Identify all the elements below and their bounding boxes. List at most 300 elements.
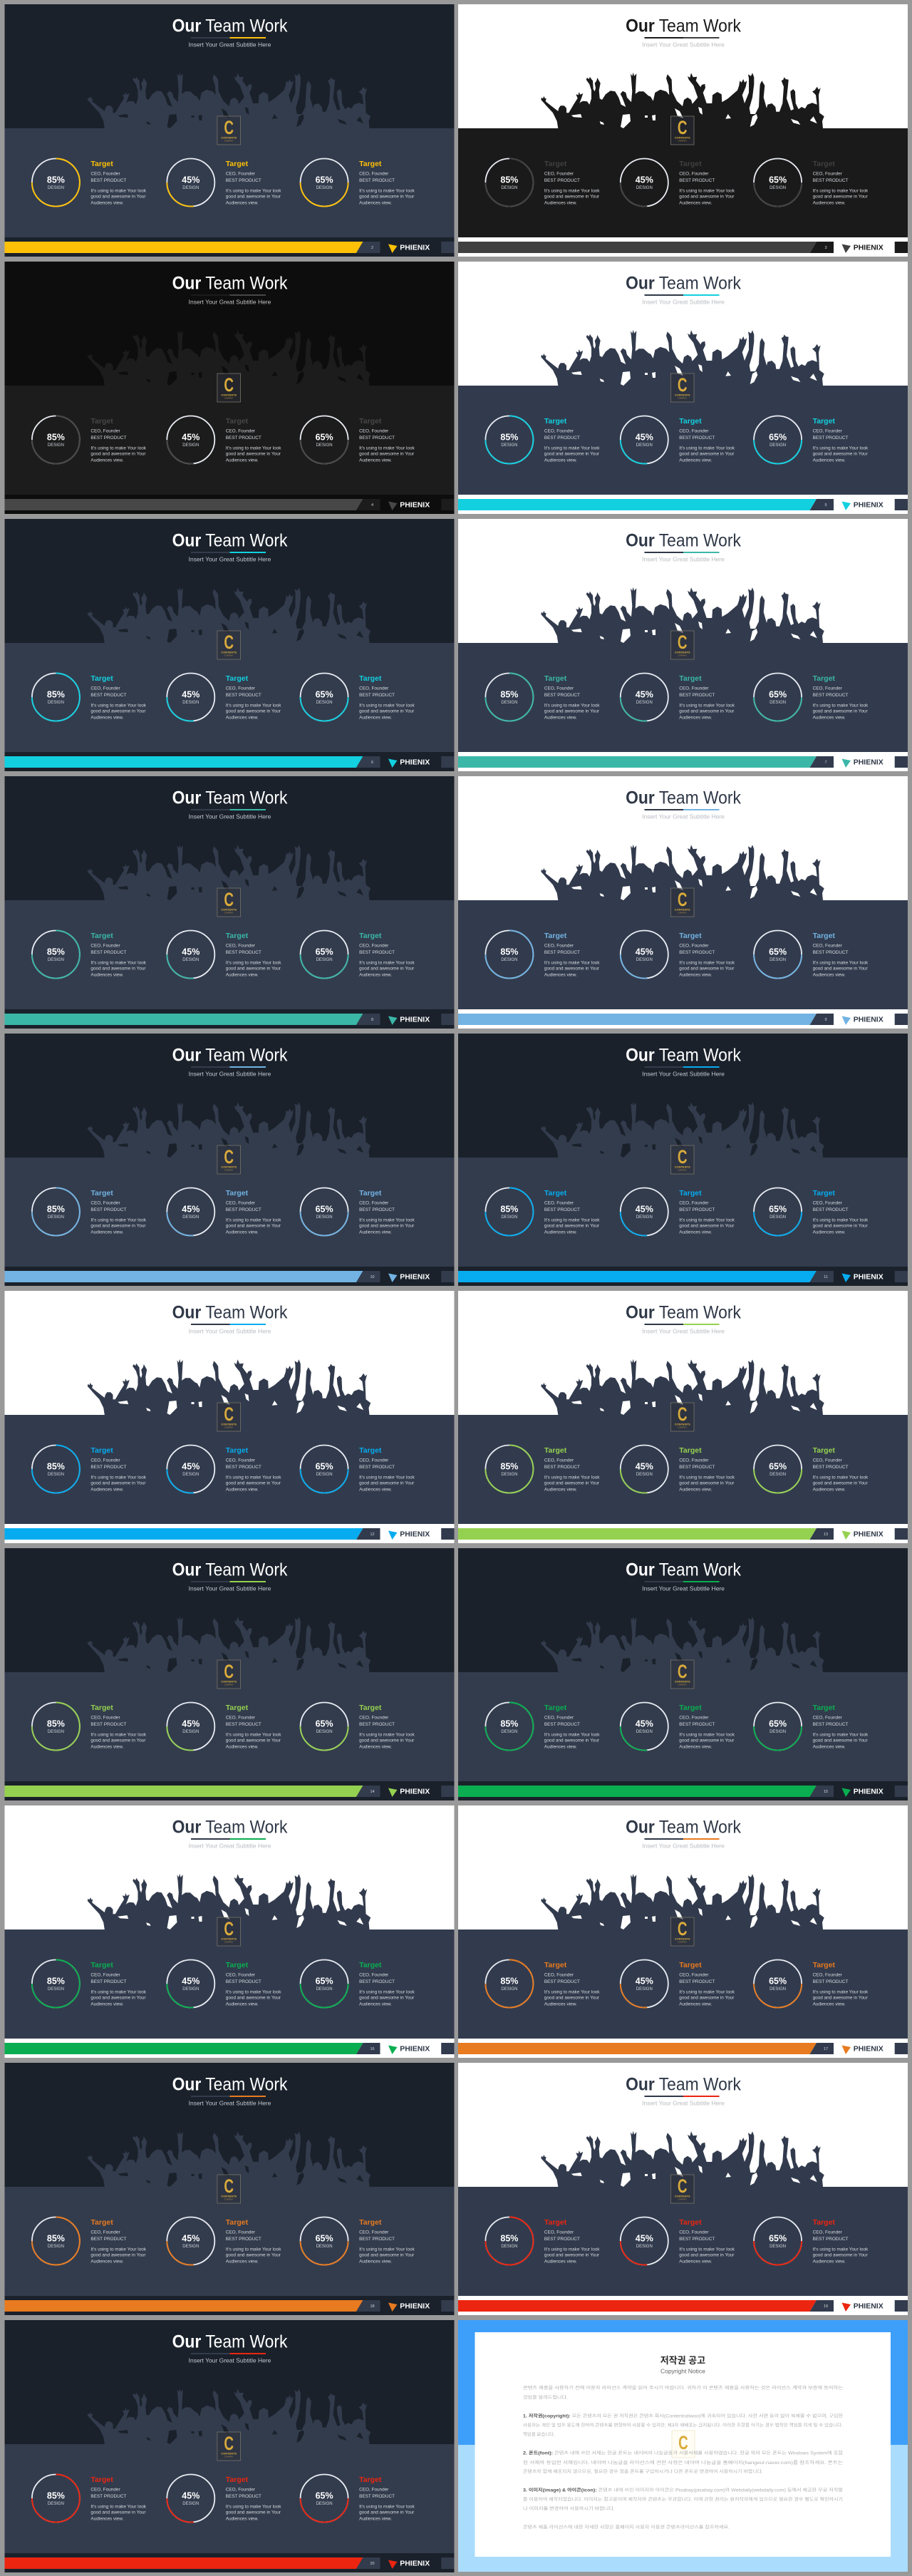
metric 65%: 65% <box>316 1977 333 1987</box>
metric 85%: Audiences view. <box>544 201 577 206</box>
metric 65%: Target <box>359 417 382 426</box>
title underline <box>644 1581 720 1582</box>
metric 65%: DESIGN <box>770 2245 786 2249</box>
metric 45%: BEST PRODUCT <box>679 1465 715 1470</box>
slide background <box>4 262 455 514</box>
metric 45%: Audiences view. <box>226 1230 259 1235</box>
logo badge: CONTENTS <box>221 393 237 396</box>
metric 65%: 65% <box>769 1719 787 1729</box>
metric 85%: DESIGN <box>48 1473 64 1477</box>
metric 45%: Audiences view. <box>679 1488 712 1493</box>
metric 85%: It's using to make Your look <box>544 1732 600 1737</box>
metric 65%: 65% <box>769 1205 787 1215</box>
logo badge: COMPANY <box>678 1426 687 1428</box>
metric 85%: good and awesome in Your <box>90 1996 146 2001</box>
metric 45%: Audiences view. <box>679 2260 712 2265</box>
logo badge: COMPANY <box>678 654 687 657</box>
crowd silhouette <box>541 1359 824 1415</box>
metric 85% <box>485 416 600 463</box>
title: Our Team Work <box>626 1817 742 1838</box>
metric 45%: CEO, Founder <box>679 1201 709 1206</box>
metric 65%: Audiences view. <box>359 458 392 463</box>
metric 45%: CEO, Founder <box>226 172 256 177</box>
metric 45%: It's using to make Your look <box>679 445 735 450</box>
title underline <box>644 1838 720 1840</box>
title underline <box>191 2096 266 2097</box>
metric 45%: 45% <box>636 1462 653 1472</box>
metric 65%: good and awesome in Your <box>359 967 415 972</box>
content panel <box>4 2187 455 2296</box>
metric 85%: It's using to make Your look <box>90 703 147 708</box>
metric 85%: good and awesome in Your <box>544 195 600 200</box>
metric 85%: BEST PRODUCT <box>90 1207 126 1212</box>
metric 45%: DESIGN <box>182 1215 199 1220</box>
footer bar: PHIENIX <box>854 758 884 767</box>
metric 45%: Target <box>226 674 249 683</box>
footer bar: PHIENIX <box>854 1273 884 1282</box>
title: Our Team Work <box>172 788 288 808</box>
metric 85%: Audiences view. <box>544 458 577 463</box>
metric 65% <box>301 1702 415 1751</box>
logo badge: COMPANY <box>224 1426 234 1428</box>
clause 3: image and icon: 나 이미지를 변경하여 사용하시기 바랍니다. <box>523 2505 615 2511</box>
content panel <box>458 386 908 495</box>
metric 85%: 85% <box>47 1977 65 1987</box>
metric 85%: Target <box>90 674 113 683</box>
metric 45%: Audiences view. <box>226 201 259 206</box>
logo badge: CONTENTS <box>221 1679 237 1684</box>
logo badge: COMPANY <box>678 1684 687 1686</box>
metric 85%: It's using to make Your look <box>544 2247 600 2252</box>
metric 85%: 85% <box>500 1205 518 1215</box>
metric 65%: Target <box>359 1961 382 1969</box>
metric 65% <box>754 673 869 721</box>
metric 45%: DESIGN <box>636 1215 653 1220</box>
title: Our Team Work <box>172 2074 288 2095</box>
logo badge: C <box>678 1146 688 1168</box>
crowd silhouette <box>88 845 370 900</box>
metric 85%: 85% <box>47 1205 65 1215</box>
metric 65%: 65% <box>316 1719 333 1729</box>
metric 65%: good and awesome in Your <box>813 452 869 457</box>
metric 45% <box>167 1446 281 1493</box>
logo badge: C <box>678 1918 688 1939</box>
metric 65%: DESIGN <box>770 1987 786 1992</box>
metric 45%: CEO, Founder <box>226 1716 256 1721</box>
metric 45%: It's using to make Your look <box>226 1989 281 1994</box>
metric 45%: DESIGN <box>636 701 653 705</box>
content panel <box>458 900 908 1009</box>
metric 85% <box>32 1446 147 1493</box>
metric 65%: Target <box>813 160 835 168</box>
metric 65%: It's using to make Your look <box>813 445 869 450</box>
footer bar: PHIENIX <box>400 2560 430 2568</box>
metric 65%: It's using to make Your look <box>813 188 869 193</box>
metric 65%: Audiences view. <box>359 716 392 721</box>
metric 85% <box>485 673 600 721</box>
content panel <box>4 1672 455 1781</box>
metric 45%: BEST PRODUCT <box>226 1465 261 1470</box>
metric 65%: CEO, Founder <box>359 686 389 691</box>
metric 85%: Target <box>90 1189 113 1197</box>
clause 1: copyright: 책임을 묻습니다. <box>523 2432 555 2438</box>
metric 65%: CEO, Founder <box>813 1201 843 1206</box>
metric 45% <box>167 673 281 721</box>
metric 65%: Audiences view. <box>813 2002 846 2007</box>
metric 45%: BEST PRODUCT <box>226 1979 261 1984</box>
metric 45%: Target <box>226 160 249 168</box>
metric 65%: It's using to make Your look <box>359 2504 415 2509</box>
metric 45%: DESIGN <box>182 186 199 190</box>
metric 85%: good and awesome in Your <box>90 452 146 457</box>
metric 65%: It's using to make Your look <box>813 2247 869 2252</box>
metric 85%: It's using to make Your look <box>90 1475 147 1480</box>
metric 65% <box>301 158 415 207</box>
metric 45%: 45% <box>182 433 200 443</box>
metric 65%: good and awesome in Your <box>813 2253 869 2258</box>
metric 85%: DESIGN <box>48 1987 64 1992</box>
metric 45%: BEST PRODUCT <box>679 1979 715 1984</box>
metric 85%: BEST PRODUCT <box>544 178 580 183</box>
footer bar: PHIENIX <box>854 1788 884 1796</box>
footer bar <box>4 2557 455 2569</box>
metric 85%: 85% <box>47 175 65 185</box>
metric 85%: 85% <box>47 690 65 700</box>
metric 45%: Target <box>679 2218 702 2227</box>
metric 45%: It's using to make Your look <box>679 1732 735 1737</box>
metric 85%: Audiences view. <box>90 458 123 463</box>
metric 65%: good and awesome in Your <box>359 2253 415 2258</box>
metric 85%: Target <box>544 2218 567 2227</box>
metric 65%: Target <box>813 2218 835 2227</box>
footer bar: 5 <box>824 503 827 508</box>
metric 65%: It's using to make Your look <box>359 1732 415 1737</box>
metric 85% <box>32 931 147 978</box>
slide 10: dark, light blue accent <box>4 1034 455 1286</box>
metric 65%: CEO, Founder <box>359 1973 389 1978</box>
logo badge: C <box>224 2433 234 2454</box>
metric 65%: 65% <box>769 1977 787 1987</box>
metric 85%: Target <box>544 1446 567 1455</box>
metric 65%: It's using to make Your look <box>813 1989 869 1994</box>
logo badge: CONTENTS <box>221 1165 237 1169</box>
slide background <box>4 1805 455 2058</box>
metric 65%: Audiences view. <box>813 1745 846 1750</box>
metric 45%: BEST PRODUCT <box>226 1207 261 1212</box>
metric 45%: good and awesome in Your <box>226 2253 281 2258</box>
metric 45%: Target <box>226 417 249 426</box>
footer bar: PHIENIX <box>854 244 884 252</box>
content panel <box>458 1930 908 2039</box>
metric 85%: It's using to make Your look <box>90 1217 147 1222</box>
metric 45%: 45% <box>182 175 200 185</box>
metric 65%: Audiences view. <box>813 201 846 206</box>
logo badge: COMPANY <box>224 396 234 399</box>
metric 45%: good and awesome in Your <box>679 452 735 457</box>
metric 65%: DESIGN <box>316 2245 333 2249</box>
metric 85% <box>485 158 600 207</box>
metric 65%: BEST PRODUCT <box>813 2237 849 2242</box>
metric 85%: BEST PRODUCT <box>90 2494 126 2499</box>
metric 85%: 85% <box>47 1719 65 1729</box>
metric 85%: Target <box>544 932 567 940</box>
metric 65% <box>301 2475 415 2522</box>
metric 45%: CEO, Founder <box>226 944 256 949</box>
metric 65%: DESIGN <box>770 1730 786 1734</box>
metric 85%: Target <box>90 160 113 168</box>
logo badge: COMPANY <box>224 140 234 143</box>
metric 65%: CEO, Founder <box>359 1458 389 1463</box>
subtitle: Insert Your Great Subtitle Here <box>189 813 271 820</box>
metric 45%: Target <box>226 1189 249 1197</box>
metric 85%: 85% <box>500 1462 518 1472</box>
metric 65%: Audiences view. <box>359 1745 392 1750</box>
metric 45%: Target <box>679 674 702 683</box>
content panel <box>4 128 455 237</box>
logo badge: CONTENTS <box>675 2194 690 2198</box>
metric 65%: It's using to make Your look <box>359 2247 415 2252</box>
footer bar <box>458 242 908 253</box>
metric 45%: Target <box>679 1704 702 1712</box>
metric 65%: DESIGN <box>770 1473 786 1477</box>
footer bar: 13 <box>824 1532 828 1537</box>
metric 45%: It's using to make Your look <box>226 2247 281 2252</box>
content panel <box>4 900 455 1009</box>
metric 45%: BEST PRODUCT <box>226 950 261 955</box>
slide background <box>458 1805 908 2058</box>
metric 65%: CEO, Founder <box>359 1201 389 1206</box>
metric 65%: Target <box>813 1961 835 1969</box>
logo badge <box>670 1145 694 1174</box>
title: Our Team Work <box>626 2074 742 2095</box>
metric 85%: DESIGN <box>48 958 64 962</box>
metric 65%: Audiences view. <box>359 973 392 978</box>
metric 85%: DESIGN <box>501 443 517 448</box>
slide 5: white, cyan accent <box>458 262 908 514</box>
metric 65%: DESIGN <box>316 701 333 705</box>
footer bar <box>458 756 908 768</box>
metric 85%: Target <box>90 932 113 940</box>
footer bar <box>4 1271 455 1282</box>
metric 65%: 65% <box>769 1462 787 1472</box>
title: Our Team Work <box>172 1302 288 1323</box>
metric 65% <box>754 931 869 978</box>
logo badge <box>670 888 694 917</box>
footer bar <box>4 2043 455 2054</box>
metric 85%: CEO, Founder <box>90 429 120 434</box>
metric 65%: Target <box>359 932 382 940</box>
slide background <box>4 4 455 257</box>
metric 85%: 85% <box>500 947 518 957</box>
footer bar <box>458 1014 908 1025</box>
metric 65%: CEO, Founder <box>813 944 843 949</box>
title: Our Team Work <box>626 1560 742 1580</box>
metric 85%: DESIGN <box>501 1215 517 1220</box>
metric 45%: CEO, Founder <box>679 172 709 177</box>
metric 45%: It's using to make Your look <box>226 1217 281 1222</box>
logo badge <box>217 1403 241 1431</box>
metric 65%: DESIGN <box>770 701 786 705</box>
metric 45% <box>167 1960 281 2008</box>
metric 45%: 45% <box>636 2234 653 2244</box>
slide 4: black <box>4 262 455 514</box>
metric 85%: CEO, Founder <box>90 1973 120 1978</box>
metric 45% <box>621 673 735 721</box>
metric 85% <box>32 673 147 721</box>
logo badge <box>217 2432 241 2461</box>
metric 65%: It's using to make Your look <box>359 960 415 965</box>
subtitle: Insert Your Great Subtitle Here <box>642 813 725 820</box>
metric 65%: CEO, Founder <box>813 2230 843 2235</box>
metric 65%: CEO, Founder <box>359 172 389 177</box>
logo badge <box>670 1917 694 1946</box>
metric 65%: BEST PRODUCT <box>359 1465 395 1470</box>
metric 65% <box>301 416 415 463</box>
crowd silhouette <box>88 73 370 128</box>
logo badge: CONTENTS <box>675 908 690 911</box>
logo badge <box>217 1145 241 1174</box>
metric 65%: Target <box>813 1446 835 1455</box>
footer bar: 8 <box>371 1018 373 1022</box>
metric 45%: BEST PRODUCT <box>226 693 261 698</box>
metric 65%: BEST PRODUCT <box>359 2494 395 2499</box>
metric 85%: 85% <box>500 175 518 185</box>
metric 65%: BEST PRODUCT <box>359 950 395 955</box>
metric 85%: Audiences view. <box>90 1745 123 1750</box>
metric 85%: good and awesome in Your <box>90 195 146 200</box>
metric 65% <box>301 2217 415 2265</box>
metric 65%: It's using to make Your look <box>359 188 415 193</box>
metric 45%: DESIGN <box>182 1730 199 1734</box>
metric 65% <box>754 1960 869 2007</box>
metric 45%: Target <box>226 1446 249 1455</box>
metric 45%: Target <box>226 2218 249 2227</box>
subtitle: Insert Your Great Subtitle Here <box>642 556 725 563</box>
metric 45%: 45% <box>636 690 653 700</box>
footer bar <box>458 499 908 510</box>
metric 85% <box>32 1702 147 1751</box>
subtitle: Insert Your Great Subtitle Here <box>189 1842 271 1849</box>
metric 45%: DESIGN <box>182 1987 199 1992</box>
clause 2: font <box>523 2451 844 2475</box>
metric 45%: Target <box>226 932 249 940</box>
logo badge: COMPANY <box>224 654 234 657</box>
metric 85%: Target <box>90 1961 113 1969</box>
clause 2: font: 된 서체와 동일한 서체입니다. 네이버 나눔글꼴 라이선스에 관한 사항은 네이버 나눔글꼴 홈페이지(hangeul.naver.com)를 참조하세요. 폰트는 <box>523 2460 844 2466</box>
footer bar <box>4 1014 455 1025</box>
metric 45%: It's using to make Your look <box>679 1475 735 1480</box>
metric 65% <box>754 1446 869 1493</box>
metric 45%: DESIGN <box>182 2502 199 2506</box>
logo badge: C <box>678 632 688 653</box>
title: Our Team Work <box>626 1302 742 1323</box>
metric 45%: Audiences view. <box>679 2002 712 2007</box>
metric 65%: Audiences view. <box>359 201 392 206</box>
metric 45%: Target <box>679 1446 702 1455</box>
slide background <box>458 1291 908 1543</box>
two-tone blue background <box>458 2320 908 2572</box>
metric 65%: CEO, Founder <box>813 1458 843 1463</box>
metric 65%: CEO, Founder <box>359 429 389 434</box>
footer bar: PHIENIX <box>854 2045 884 2054</box>
slide 7: white, teal accent <box>458 519 908 771</box>
metric 45% <box>621 1960 735 2008</box>
metric 85%: Audiences view. <box>544 2260 577 2265</box>
metric 65%: good and awesome in Your <box>813 1481 869 1486</box>
metric 65%: Target <box>359 1704 382 1712</box>
metric 45%: It's using to make Your look <box>226 1732 281 1737</box>
metric 45%: Audiences view. <box>679 973 712 978</box>
metric 65%: BEST PRODUCT <box>359 693 395 698</box>
metric 45% <box>621 931 735 979</box>
metric 65%: CEO, Founder <box>359 2230 389 2235</box>
metric 65%: 65% <box>316 433 333 443</box>
metric 65%: CEO, Founder <box>359 944 389 949</box>
metric 85%: good and awesome in Your <box>544 1481 600 1486</box>
metric 65%: BEST PRODUCT <box>813 1207 849 1212</box>
subtitle: Insert Your Great Subtitle Here <box>189 2100 271 2107</box>
metric 65%: Audiences view. <box>813 1488 846 1493</box>
metric 45%: good and awesome in Your <box>226 1738 281 1743</box>
footer bar: 10 <box>370 1275 375 1279</box>
subtitle: Insert Your Great Subtitle Here <box>642 298 725 305</box>
metric 85% <box>32 1960 147 2007</box>
crowd silhouette <box>88 2131 370 2187</box>
metric 45% <box>621 416 735 464</box>
metric 85%: good and awesome in Your <box>544 1996 600 2001</box>
metric 65%: Audiences view. <box>813 2260 846 2265</box>
footer bar: PHIENIX <box>400 2045 430 2054</box>
title underline <box>644 1066 720 1068</box>
metric 65%: CEO, Founder <box>813 1716 843 1721</box>
logo badge: COMPANY <box>224 2198 234 2201</box>
metric 85%: DESIGN <box>48 701 64 705</box>
logo badge: COMPANY <box>678 1940 687 1943</box>
metric 85%: BEST PRODUCT <box>90 436 126 441</box>
metric 85%: BEST PRODUCT <box>544 1207 580 1212</box>
title underline <box>191 1838 266 1840</box>
metric 45%: good and awesome in Your <box>679 1224 735 1229</box>
metric 65%: 65% <box>769 947 787 957</box>
title: Our Team Work <box>626 530 742 551</box>
slide 8: dark, teal accent <box>4 776 455 1029</box>
metric 85%: DESIGN <box>501 186 517 190</box>
footer bar <box>4 1528 455 1540</box>
metric 85%: Target <box>90 1704 113 1712</box>
slide background <box>4 2320 455 2572</box>
metric 45%: DESIGN <box>636 1730 653 1734</box>
metric 85%: It's using to make Your look <box>544 188 600 193</box>
metric 85%: It's using to make Your look <box>90 960 147 965</box>
content panel <box>458 1415 908 1524</box>
metric 65%: Target <box>813 674 835 683</box>
slide background <box>458 776 908 1029</box>
metric 65%: BEST PRODUCT <box>813 950 849 955</box>
metric 45%: Audiences view. <box>226 458 259 463</box>
metric 85%: Target <box>544 1961 567 1969</box>
metric 85%: CEO, Founder <box>90 1458 120 1463</box>
metric 45%: DESIGN <box>182 958 199 962</box>
metric 65%: Target <box>813 417 835 426</box>
metric 45%: 45% <box>636 947 653 957</box>
metric 45%: 45% <box>182 947 200 957</box>
metric 85%: Audiences view. <box>90 2002 123 2007</box>
metric 65%: good and awesome in Your <box>813 195 869 200</box>
metric 65%: CEO, Founder <box>813 172 843 177</box>
metric 65%: BEST PRODUCT <box>359 2237 395 2242</box>
metric 85%: It's using to make Your look <box>90 1989 147 1994</box>
slide background <box>4 1291 455 1543</box>
